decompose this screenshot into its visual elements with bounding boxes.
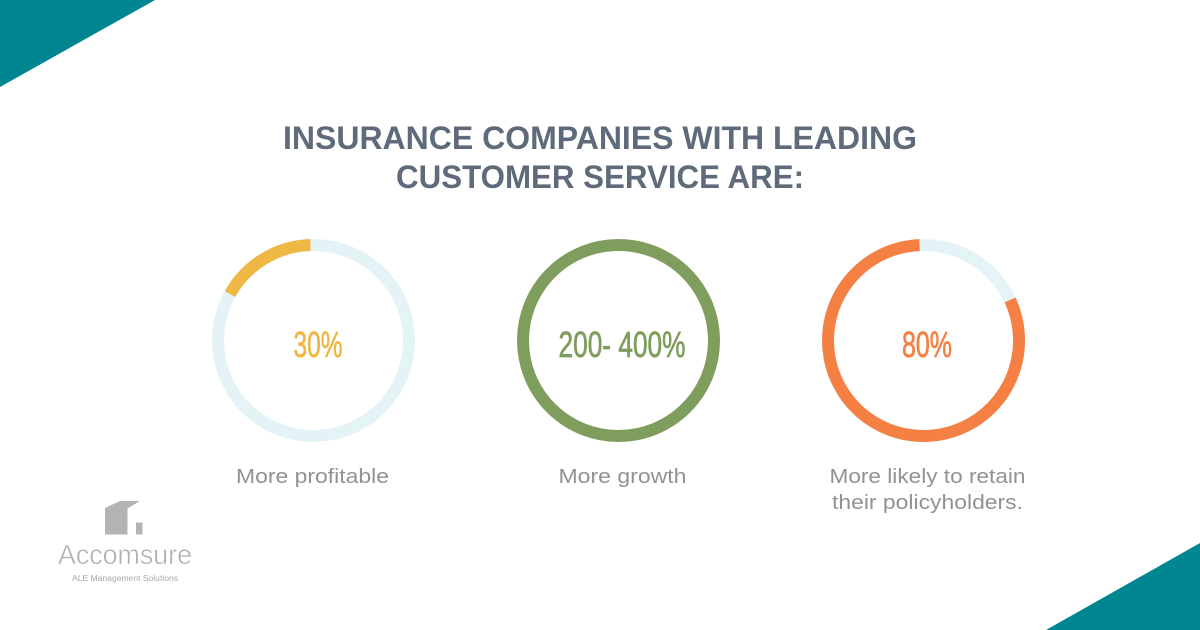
title: CUSTOMER SERVICE ARE: (396, 159, 804, 195)
value: 80%: 80% (902, 324, 952, 365)
wordmark: Accomsure (58, 539, 192, 570)
logo: Accomsure (58, 501, 192, 583)
label: more likely to retain their policyholders: More likely to retain (830, 466, 1026, 488)
ring chart: 200-400% (523, 245, 714, 436)
title: INSURANCE COMPANIES WITH LEADING (283, 120, 917, 156)
teal corner: bottom right (1046, 543, 1200, 630)
value: 30%: 30% (294, 324, 342, 365)
panel: more growth (523, 245, 714, 488)
title (283, 120, 917, 195)
icon: house (105, 501, 142, 534)
label: more growth: More growth (558, 466, 686, 488)
tagline: ALE Management Solutions (72, 574, 178, 583)
panel: more likely to retain (828, 245, 1026, 514)
label: more profitable: More profitable (236, 466, 389, 488)
ring chart: 30% (218, 245, 409, 436)
label: more likely to retain their policyholders: their policyholders. (832, 492, 1023, 514)
label: more likely to retain their policyholders (830, 466, 1026, 514)
value: 200-400%: 200- 400% (558, 324, 686, 365)
panel: more profitable (218, 245, 409, 488)
teal corner: top left (0, 0, 155, 87)
ring chart: 80% (828, 245, 1019, 436)
